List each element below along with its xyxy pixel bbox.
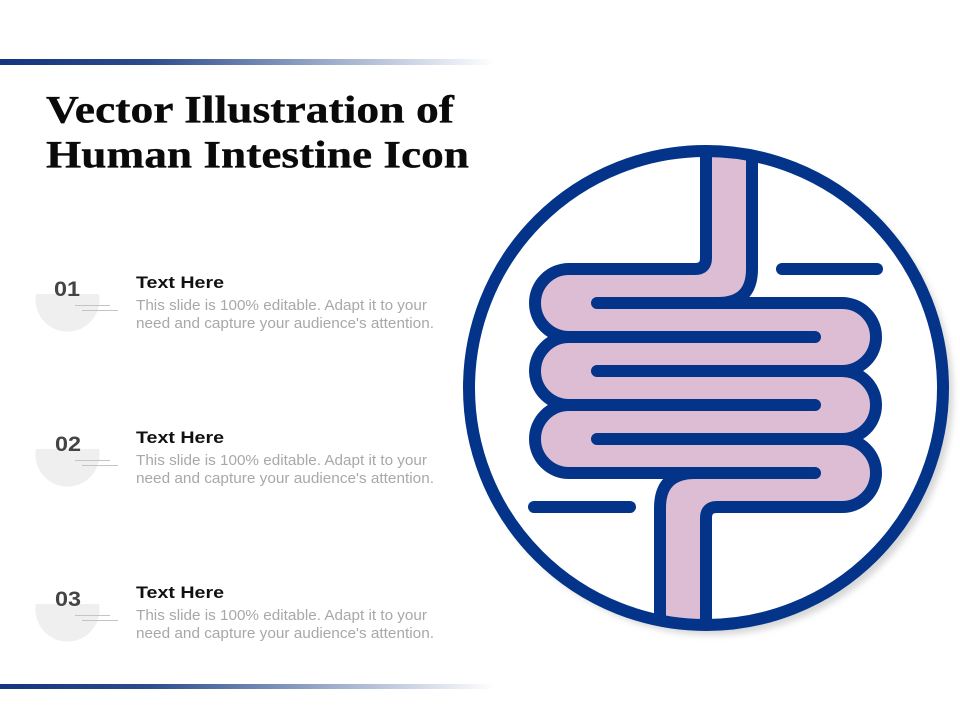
text block 02: This slide is 100% editable. Adapt it to your (136, 452, 427, 469)
bottom gradient bar (0, 684, 495, 689)
text block 01: This slide is 100% editable. Adapt it to your (136, 297, 427, 314)
text block 03 (136, 583, 434, 642)
icon: half circle badge 02: 02 (55, 433, 81, 456)
icon: half circle badge 03 (36, 588, 118, 642)
intestine fill (535, 152, 876, 622)
text block 03: need and capture your audience's attention. (136, 625, 434, 642)
item 02 (36, 428, 434, 487)
item 01 (36, 273, 434, 332)
title (46, 88, 469, 176)
text block 02: need and capture your audience's attention. (136, 470, 434, 487)
circle outline (469, 151, 943, 625)
icon: human intestine in circle (469, 151, 953, 635)
circle shadow (471, 153, 953, 635)
icon: half circle badge 02 (36, 433, 118, 487)
text block 03: Text Here (136, 583, 224, 602)
icon: half circle badge 03: 03 (55, 588, 81, 611)
intestine outline (534, 156, 877, 620)
dash: lower left (534, 501, 630, 513)
text block 01: need and capture your audience's attention. (136, 315, 434, 332)
dash: upper right (782, 263, 877, 275)
circle background (469, 151, 943, 625)
title: Vector Illustration of (46, 88, 455, 132)
icon: half circle badge 01: 01 (54, 278, 80, 301)
top gradient bar (0, 59, 495, 65)
text block 02: Text Here (136, 428, 224, 447)
item 03 (36, 583, 434, 642)
text block 01: Text Here (136, 273, 224, 292)
text block 01 (136, 273, 434, 332)
icon: half circle badge 01 (36, 278, 118, 332)
title: Human Intestine Icon (46, 134, 469, 176)
text block 02 (136, 428, 434, 487)
text block 03: This slide is 100% editable. Adapt it to your (136, 607, 427, 624)
